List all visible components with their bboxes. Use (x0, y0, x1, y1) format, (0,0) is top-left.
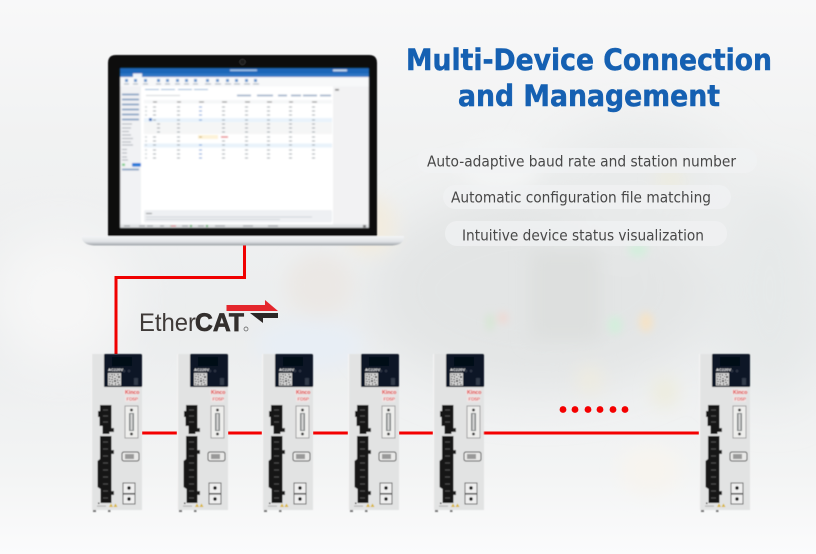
laptop bezel (108, 55, 377, 236)
log panel (144, 210, 332, 222)
servo drive 1: Kinco (125, 390, 139, 396)
servo drive 3 (262, 354, 313, 512)
arrow: dark (250, 313, 278, 323)
servo drive 2: FD5P (212, 396, 224, 402)
feature list (417, 148, 757, 246)
feature pill: status visualization: Intuitive device status visualization (462, 226, 704, 244)
feature pill: status visualization (445, 221, 727, 246)
servo drive 1: FD5P (126, 396, 138, 402)
servo drive 6: AC220V (716, 367, 731, 372)
servo drive 6: Kinco (733, 390, 747, 396)
red link segments between drives (142, 432, 699, 434)
servo drive 4: FD5P (384, 396, 395, 402)
laptop (82, 55, 404, 246)
servo drive 6 (699, 354, 750, 512)
title (406, 43, 772, 113)
servo drive 5: AC220V (450, 367, 465, 372)
EtherCAT logo (139, 300, 278, 337)
servo drive 4 (348, 354, 399, 512)
servo drive 4: AC220V (365, 367, 380, 372)
servo drive 3: FD5P (298, 396, 309, 402)
servo drive 4: Kinco (382, 390, 396, 396)
software screen (120, 68, 369, 228)
status bar (120, 224, 369, 228)
servo drive 3: Kinco (296, 390, 310, 396)
servo drive 5 (433, 354, 484, 512)
feature pill: baud rate (417, 148, 757, 173)
servo drive 1: AC220V (108, 367, 123, 372)
servo drive 3: AC220V (279, 367, 294, 372)
servo drive 2 (177, 354, 228, 512)
arrow: red (226, 300, 278, 311)
title bar (120, 68, 369, 74)
EtherCAT logo: Ether (139, 309, 196, 337)
red EtherCAT cable from laptop to first drive (116, 245, 244, 354)
servo drive 5: Kinco (467, 390, 481, 396)
title: Multi-Device Connection (406, 43, 772, 77)
servo drive 2: Kinco (211, 390, 225, 396)
webcam (240, 59, 245, 65)
servo drive 6: FD5P (734, 396, 746, 402)
table (144, 100, 332, 158)
servo drive 5: FD5P (468, 396, 480, 402)
title: and Management (458, 79, 720, 113)
feature pill: configuration file (443, 185, 731, 209)
EtherCAT logo: CAT (195, 309, 244, 337)
tabs and filters (145, 88, 208, 90)
left sidebar (120, 86, 141, 228)
continuation dots (560, 406, 628, 413)
servo drive 2: AC220V (194, 367, 209, 372)
servo drive 1 (91, 354, 142, 512)
right panel (333, 86, 369, 228)
laptop base (82, 236, 404, 246)
feature pill: configuration file: Automatic configuration file matching (451, 188, 711, 206)
toolbar (120, 77, 369, 86)
feature pill: baud rate: Auto-adaptive baud rate and station number (427, 152, 736, 170)
